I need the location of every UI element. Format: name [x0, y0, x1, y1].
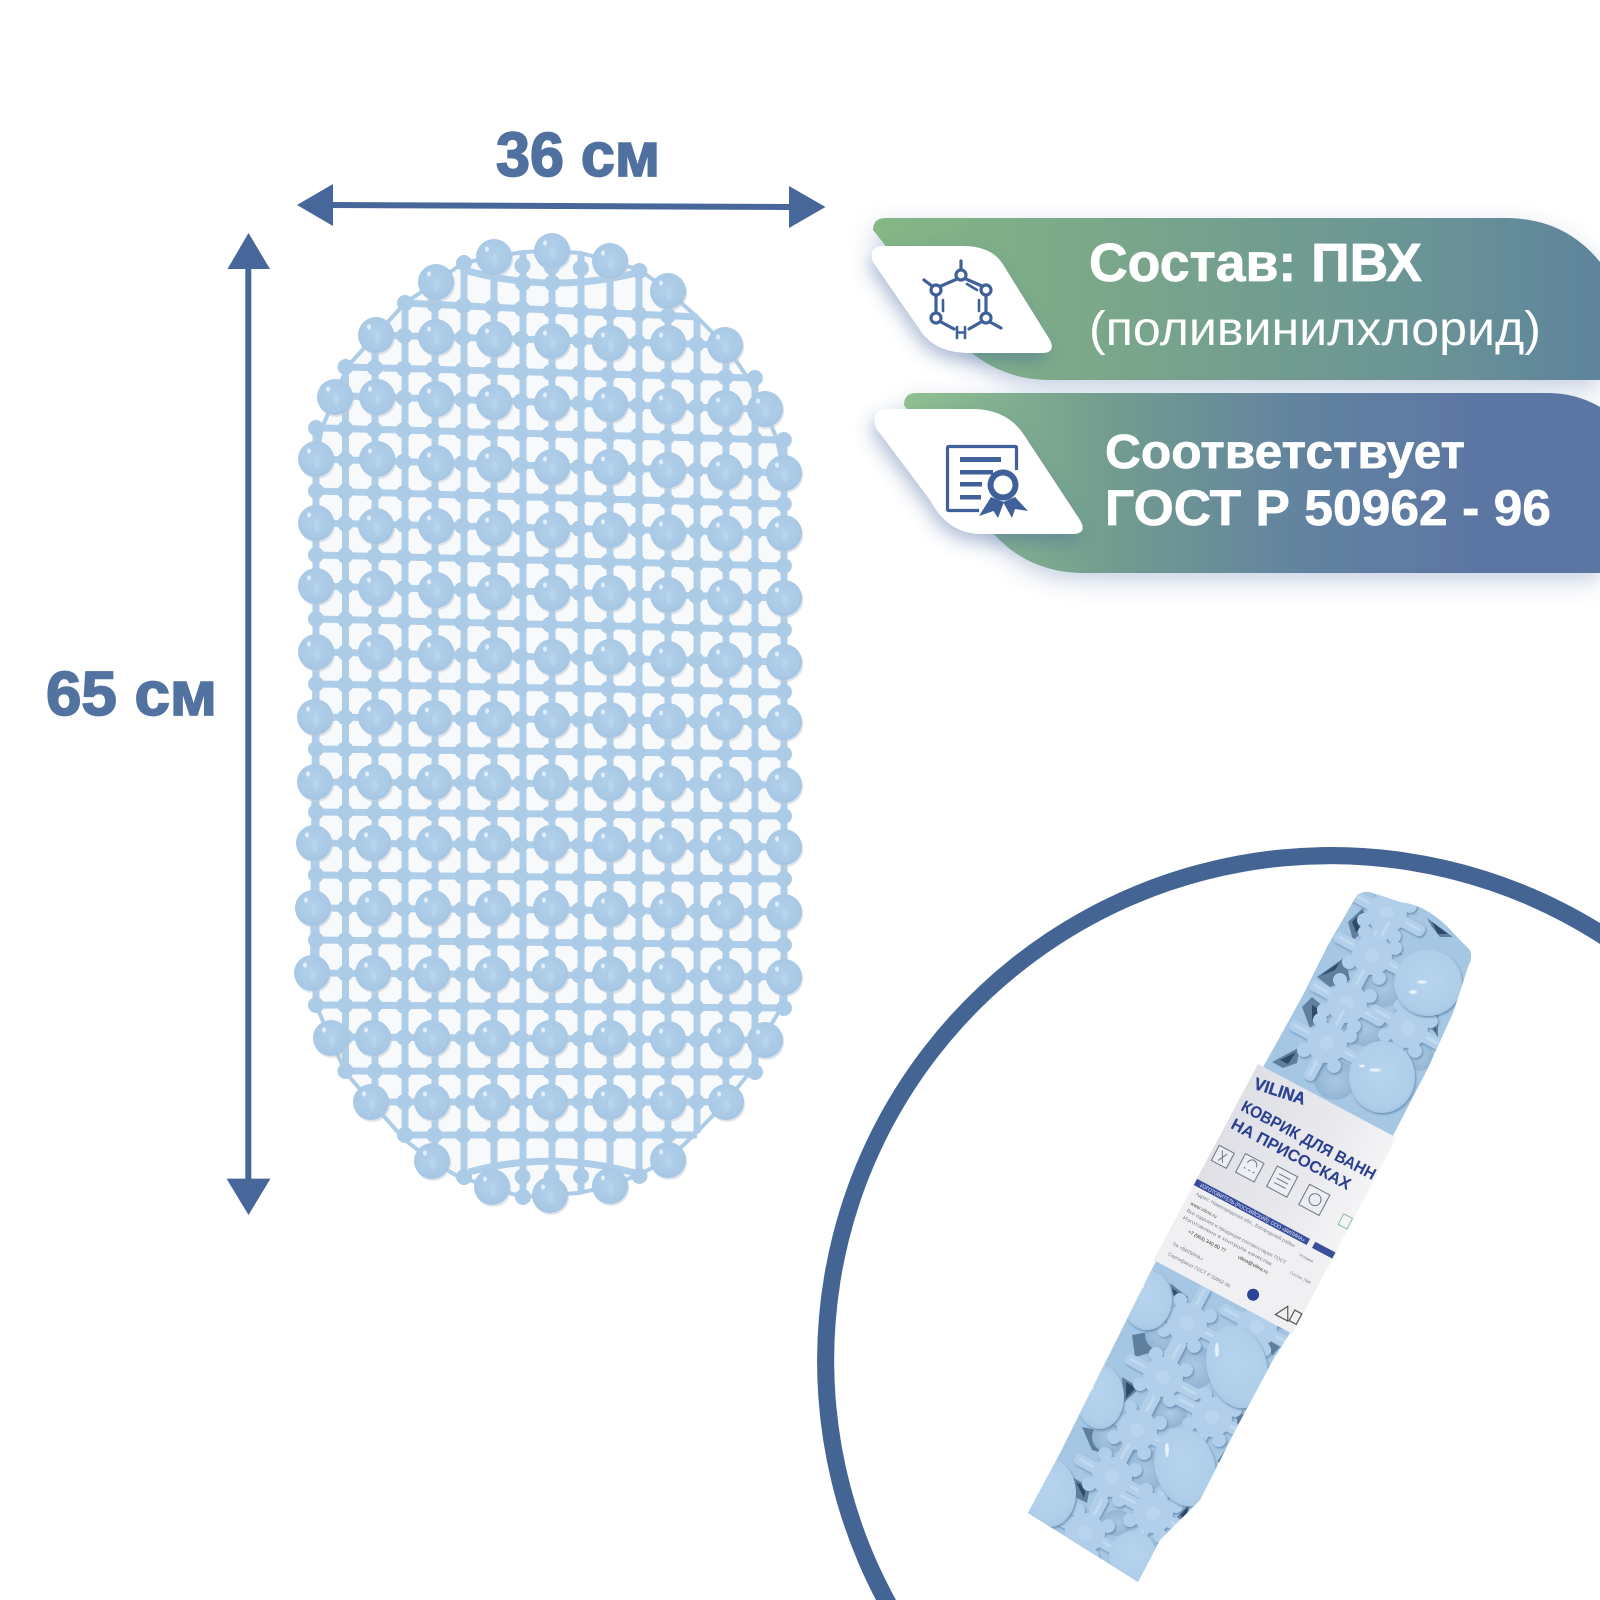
- banner shape: [873, 218, 1600, 380]
- panel: standard banner: [874, 393, 1600, 573]
- circle outline around rolled mat: [817, 847, 1600, 1600]
- product name: КОВРИК ДЛЯ ВАНН: [1238, 1097, 1379, 1184]
- mat holes: [1072, 908, 1453, 1537]
- contact details: Адрес: Нижегородская обл., Богородский район: [1194, 1190, 1297, 1249]
- manufacturer strip text: ИЗГОТОВИТЕЛЬ (РОССИЙСКИЙ): ООО «ВИЛИНА»: [1199, 1181, 1307, 1244]
- mat small nodes: [316, 263, 784, 1197]
- text: GOST number: ГОСТ Р 50962 - 96: [1105, 480, 1551, 536]
- icon: certificate: [948, 446, 1028, 518]
- text: polyvinyl chloride: (поливинилхлорид): [1089, 303, 1541, 356]
- recessed domes: [1092, 971, 1433, 1536]
- lower label area: [1154, 1185, 1332, 1334]
- contact details: Условия: [1298, 1252, 1314, 1264]
- contact details: Сертификат ГОСТ Р 50962-96: [1167, 1251, 1231, 1290]
- icon card: [874, 409, 1083, 534]
- cross ribs: [1057, 892, 1442, 1558]
- contact details: Состав: ПВХ: [1289, 1270, 1312, 1285]
- mat holes background: [312, 251, 784, 1197]
- contact details: www.vilina.ru: [1189, 1201, 1218, 1220]
- contact details: [1168, 1192, 1314, 1288]
- contact details: Все изделия и продукция соответствуют ГОСТ: [1185, 1208, 1287, 1266]
- panel: composition banner: [872, 218, 1600, 380]
- contact details: Изготовлено в контроле качества: [1182, 1215, 1273, 1268]
- arrow: height dimension: [226, 233, 270, 1215]
- brand: VILINA: [1252, 1074, 1308, 1109]
- product label band: [1154, 1064, 1397, 1334]
- manufacturer strip: [1194, 1179, 1310, 1245]
- contact details: Тм «ВИЛИНА»: [1171, 1241, 1204, 1263]
- heading: composition: Состав: ПВХ: [1089, 233, 1422, 293]
- certification marks: [1245, 1287, 1302, 1325]
- large domes: [1024, 950, 1462, 1583]
- product photo: bath mat: [294, 233, 803, 1215]
- icon card: [872, 246, 1052, 353]
- height label: 65 см: 65 см: [46, 660, 217, 729]
- manufacturer strip right: [1312, 1242, 1336, 1259]
- dome highlights: [1086, 980, 1427, 1457]
- product photo: rolled mat: [1028, 892, 1472, 1582]
- mat grid lines: [316, 251, 784, 1197]
- width label: 36 см: 36 см: [496, 121, 660, 190]
- text: conforms to: Соответствует: [1105, 426, 1465, 479]
- contact details: vilina@vilina.ru: [1237, 1255, 1269, 1276]
- roll body: [1028, 892, 1472, 1582]
- mat balls: [294, 233, 803, 1215]
- green mark: [1338, 1214, 1353, 1229]
- icon: molecule: [924, 261, 1001, 338]
- arrow: width dimension: [297, 184, 826, 228]
- dark hole shadows: [1076, 912, 1448, 1520]
- banner shape: [904, 393, 1600, 573]
- product name line 2: НА ПРИСОСКАХ: [1228, 1115, 1354, 1194]
- contact details: +7 (963) 340 80 77: [1187, 1229, 1227, 1254]
- feature icons: [1211, 1137, 1330, 1217]
